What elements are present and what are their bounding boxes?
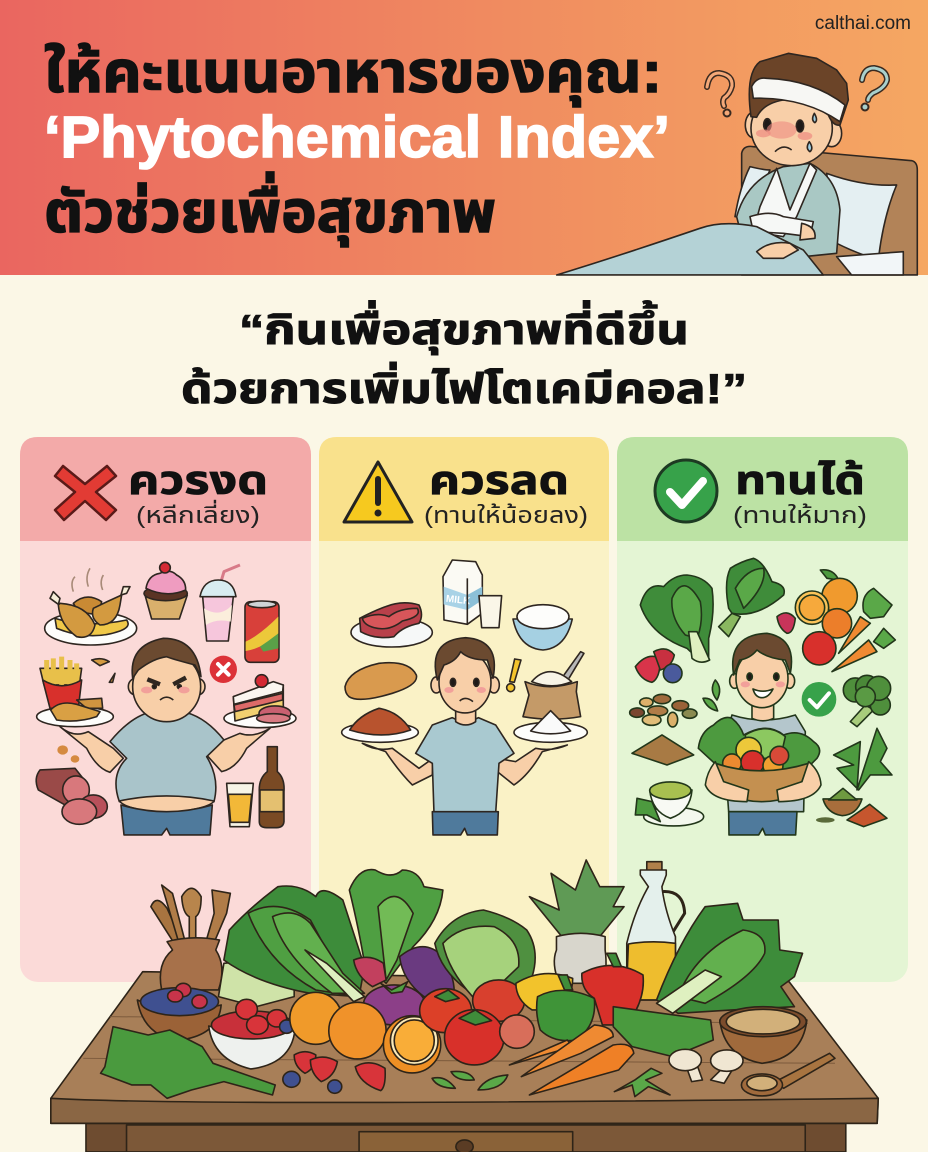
heading: avoid: ควรงด <box>128 459 268 503</box>
cupcake <box>144 562 187 619</box>
cabbage <box>435 910 535 997</box>
green tea <box>635 782 704 826</box>
strawberry and tomato <box>777 613 836 665</box>
overweight man <box>60 638 270 835</box>
carrots <box>509 1007 713 1095</box>
bread <box>345 663 417 699</box>
milk carton <box>443 560 502 628</box>
grain pile <box>632 735 694 765</box>
green leaves left <box>218 870 443 1007</box>
panel: limit: (ทานให้น้อยลง) <box>424 502 588 528</box>
badge: cross <box>210 656 237 683</box>
icon: red cross <box>55 466 116 520</box>
salami <box>36 745 107 824</box>
flour sack and salt plate <box>514 652 587 742</box>
title: ให้คะแนนอาหารของคุณ: <box>44 40 662 107</box>
berry bowl <box>137 983 221 1041</box>
soda cup <box>200 565 240 641</box>
title: ‘Phytochemical Index’ <box>44 105 670 170</box>
heading: eat freely: ทานได้ <box>735 458 865 503</box>
cake plate <box>224 675 296 728</box>
loose strawberries and blueberries <box>283 1052 385 1093</box>
radish, eggplant, turnip <box>354 947 454 1025</box>
title: ตัวช่วยเพื่อสุขภาพ <box>44 171 496 247</box>
spice bowl <box>816 788 887 827</box>
panel: avoid <box>20 437 311 982</box>
nuts <box>630 694 697 727</box>
badge: check <box>802 682 836 717</box>
wooden spoon <box>741 1053 835 1096</box>
illustration: table full of vegetables <box>51 860 878 1152</box>
parsley bunch <box>101 1027 275 1098</box>
source label: calthai.com <box>815 13 911 34</box>
oil bottle <box>627 862 685 1000</box>
icon: warning triangle <box>344 462 412 522</box>
panel: eat freely: (ทานให้มาก) <box>733 502 867 528</box>
bok choy <box>640 575 713 662</box>
soda can <box>245 601 279 662</box>
green leaves right <box>657 903 803 1013</box>
exclamation mark <box>507 659 521 692</box>
scattered leaves <box>432 1068 670 1097</box>
fries and chicken plate <box>37 657 115 727</box>
worried man <box>362 638 567 835</box>
mushrooms <box>669 1049 743 1083</box>
small leaves <box>703 680 720 711</box>
beer glass <box>227 783 253 827</box>
panel: eat freely <box>617 437 908 982</box>
tomatoes <box>420 980 534 1065</box>
fried chicken plate <box>45 568 137 645</box>
rice bowl <box>513 605 572 650</box>
steak plate <box>351 603 432 647</box>
pasta plate <box>342 708 418 742</box>
carrots <box>832 588 895 672</box>
panel: limit <box>319 437 609 982</box>
slogan: ด้วยการเพิ่มไฟโตเคมีคอล!” <box>181 361 747 412</box>
oranges <box>290 992 441 1073</box>
question marks <box>707 68 887 116</box>
illustration: sick person in bed <box>557 53 917 275</box>
table <box>51 972 878 1152</box>
milk carton: MILK <box>445 594 472 607</box>
peppers <box>516 953 643 1041</box>
slogan <box>181 300 747 412</box>
illustration: man with moderate foods <box>342 560 587 835</box>
title <box>44 40 670 247</box>
broccoli <box>843 675 891 727</box>
grain bowl <box>720 1007 807 1063</box>
strawberry bowl <box>209 999 295 1069</box>
berries <box>635 649 682 683</box>
illustration: healthy man with basket <box>630 558 895 835</box>
panel: avoid: (หลีกเลี่ยง) <box>136 499 260 528</box>
happy man with basket <box>698 633 821 835</box>
slogan: “กินเพื่อสุขภาพที่ดีขึ้น <box>239 300 689 355</box>
heading: limit: ควรลด <box>429 459 569 503</box>
parsley <box>834 728 892 790</box>
herb jar <box>529 860 624 983</box>
spinach bunch <box>719 558 784 637</box>
illustration: overweight man with junk food <box>36 562 296 835</box>
icon: green check <box>655 460 717 522</box>
beer bottle <box>259 747 284 828</box>
wooden utensils and pot <box>151 885 230 990</box>
header banner <box>0 0 928 275</box>
oranges <box>795 570 857 638</box>
